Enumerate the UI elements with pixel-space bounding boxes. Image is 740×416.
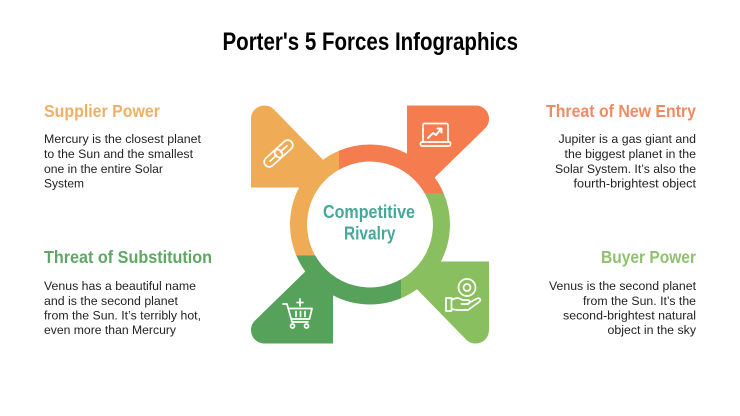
panel: threat of new entry text — [546, 101, 697, 190]
segment: supplier power — [251, 105, 339, 255]
diagram: pinwheel — [251, 105, 489, 344]
text block: buyer power: second-brightest natural — [563, 308, 696, 322]
title: Porter's 5 Forces Infographics — [222, 28, 518, 56]
text block: threat of new entry: fourth-brightest object — [574, 176, 697, 190]
segment: buyer power — [401, 194, 489, 344]
icon: hand holding coin — [446, 279, 480, 311]
center label: competitive rivalry — [323, 201, 415, 244]
segment: threat of substitution — [251, 256, 401, 344]
panel: buyer power text — [549, 247, 697, 337]
center label: competitive rivalry: Competitive — [323, 201, 415, 222]
text block: supplier power — [44, 132, 202, 190]
heading: threat of substitution: Threat of Substitution — [44, 247, 212, 267]
text block: threat of substitution: from the Sun. It’s terribly hot, — [44, 308, 201, 322]
heading: buyer power: Buyer Power — [601, 247, 696, 267]
text block: supplier power: System — [44, 176, 84, 190]
text block: threat of substitution — [44, 279, 201, 337]
text block: supplier power: Mercury is the closest planet — [44, 132, 202, 146]
icon: laptop with chart — [420, 124, 450, 146]
text block: threat of substitution: and is the second planet — [44, 294, 179, 308]
text block: threat of new entry: Jupiter is a gas giant and — [558, 132, 696, 146]
text block: buyer power — [549, 279, 697, 337]
center label: competitive rivalry: Rivalry — [344, 222, 396, 244]
text block: threat of new entry — [555, 132, 697, 190]
icon: shopping cart — [283, 299, 312, 328]
panel: threat of substitution text — [44, 247, 212, 337]
text block: buyer power: from the Sun. It’s the — [583, 294, 696, 308]
text block: buyer power: object in the sky — [608, 323, 697, 337]
icon: chain link — [262, 138, 295, 169]
segment: threat of new entry — [339, 105, 489, 194]
text block: supplier power: to the Sun and the smallest — [44, 147, 194, 161]
text block: threat of new entry: the biggest planet in the — [564, 147, 696, 161]
heading: supplier power: Supplier Power — [44, 101, 160, 121]
heading: threat of new entry: Threat of New Entry — [546, 101, 696, 121]
text block: threat of substitution: Venus has a beautiful name — [44, 279, 196, 293]
text block: buyer power: Venus is the second planet — [549, 279, 697, 293]
text block: supplier power: one in the entire Solar — [44, 162, 163, 176]
text block: threat of substitution: even more than Mercury — [44, 323, 177, 337]
text block: threat of new entry: Solar System. It’s also the — [555, 162, 696, 176]
panel: supplier power text — [44, 101, 202, 190]
